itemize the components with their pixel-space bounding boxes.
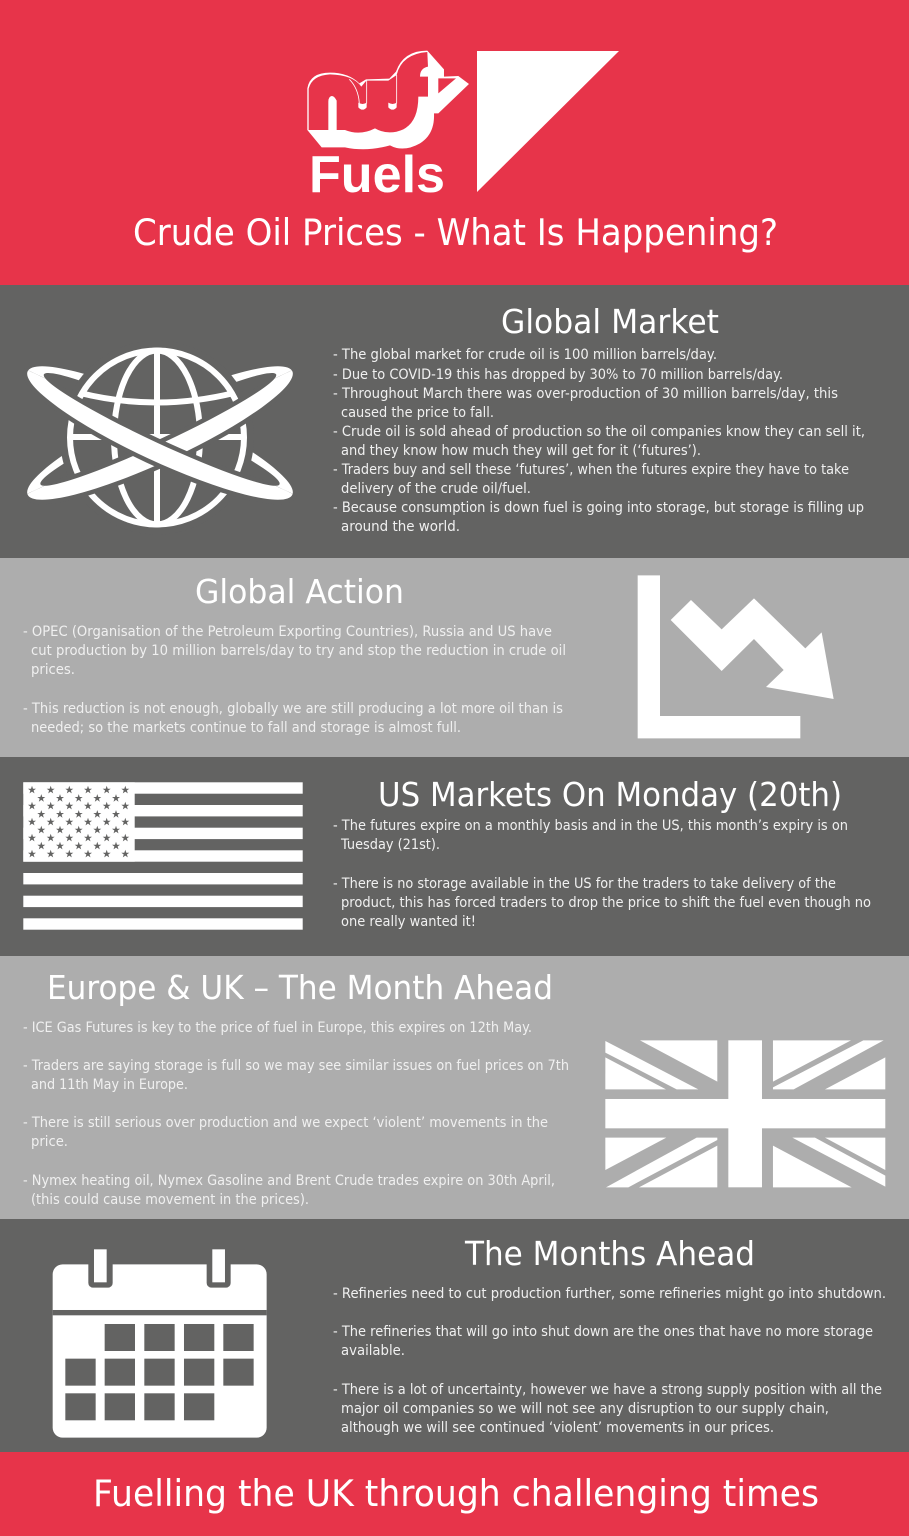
panel: months ahead bbox=[0, 1219, 909, 1452]
text block: us markets: - There is no storage available in the US for the traders to take delivery of the bbox=[333, 876, 836, 892]
panel: global market bbox=[27, 308, 864, 531]
text block: global action: - This reduction is not enough, globally we are still producing a lot more oil than is bbox=[23, 701, 563, 717]
text block: global market: - Because consumption is down fuel is going into storage, but storage is filling up bbox=[333, 500, 864, 516]
text block: us markets: one really wanted it! bbox=[341, 914, 476, 930]
footer tagline: Fuelling the UK through challenging times bbox=[93, 1472, 819, 1515]
heading: global market: Global Market bbox=[501, 302, 719, 341]
text block: europe and uk bbox=[23, 1020, 569, 1208]
panel: global action bbox=[0, 558, 909, 757]
text block: global market: - Crude oil is sold ahead of production so the oil companies know they can sell it, bbox=[333, 424, 865, 440]
icon: nwf letters bbox=[307, 51, 469, 149]
heading: global action: Global Action bbox=[195, 572, 404, 611]
text block: europe and uk: - Traders are saying storage is full so we may see similar issues on fuel prices on 7th bbox=[23, 1058, 569, 1074]
text block: us markets: Tuesday (21st). bbox=[340, 837, 440, 853]
text block: global market: and they know how much they will get for it (‘futures’). bbox=[341, 443, 701, 459]
text block: months ahead: available. bbox=[341, 1343, 405, 1359]
text block: months ahead: major oil companies so we will not see any disruption to our supply chain, bbox=[341, 1401, 829, 1417]
text block: global action: prices. bbox=[31, 662, 75, 678]
text block: europe and uk: and 11th May in Europe. bbox=[31, 1077, 188, 1093]
text block: months ahead bbox=[333, 1286, 886, 1436]
text block: europe and uk: - Nymex heating oil, Nymex Gasoline and Brent Crude trades expire on 30th April, bbox=[23, 1173, 555, 1189]
text block: months ahead: - The refineries that will go into shut down are the ones that have no more storage bbox=[333, 1324, 873, 1340]
text block: global market bbox=[333, 347, 865, 535]
text block: us markets bbox=[333, 818, 871, 930]
panel: footer bbox=[0, 1452, 909, 1536]
text block: global market: - Due to COVID-19 this has dropped by 30% to 70 million barrels/day. bbox=[333, 367, 783, 383]
text block: global action bbox=[23, 624, 566, 736]
text block: months ahead: although we will see continued ‘violent’ movements in our prices. bbox=[341, 1420, 774, 1436]
text block: global market: around the world. bbox=[341, 519, 460, 535]
text block: global action: cut production by 10 million barrels/day to try and stop the reduction in crude oil bbox=[31, 643, 566, 659]
logo wordmark: Fuels bbox=[309, 146, 445, 204]
text block: us markets: product, this has forced traders to drop the price to shift the fuel even though no bbox=[341, 895, 871, 911]
text block: global market: - Traders buy and sell these ‘futures’, when the futures expire they have to take bbox=[333, 462, 849, 478]
panel: europe and uk bbox=[0, 956, 909, 1219]
heading: months ahead: The Months Ahead bbox=[464, 1234, 755, 1273]
text block: months ahead: - Refineries need to cut production further, some refineries might go into shutdown. bbox=[333, 1286, 886, 1302]
icon: US flag bbox=[23, 782, 303, 930]
icon: globe with orbits bbox=[27, 348, 293, 528]
icon: falling chart bbox=[638, 575, 834, 738]
text block: us markets: - The futures expire on a monthly basis and in the US, this month’s expiry is on bbox=[333, 818, 848, 834]
logo: nwf Fuels bbox=[307, 51, 619, 204]
title: Crude Oil Prices - What Is Happening? bbox=[133, 211, 778, 254]
text block: months ahead: - There is a lot of uncertainty, however we have a strong supply position with all the bbox=[333, 1382, 882, 1398]
text block: europe and uk: (this could cause movement in the prices). bbox=[31, 1192, 309, 1208]
text block: global action: needed; so the markets continue to fall and storage is almost full. bbox=[31, 720, 461, 736]
text block: global action: - OPEC (Organisation of the Petroleum Exporting Countries), Russia and US have bbox=[23, 624, 552, 640]
heading: europe and uk: Europe & UK – The Month Ahead bbox=[47, 968, 553, 1007]
text block: global market: caused the price to fall. bbox=[341, 405, 494, 421]
text block: europe and uk: price. bbox=[31, 1134, 68, 1150]
text block: global market: - Throughout March there was over-production of 30 million barrels/day, this bbox=[333, 386, 838, 402]
text block: global market: - The global market for crude oil is 100 million barrels/day. bbox=[333, 347, 717, 363]
heading: us markets: US Markets On Monday (20th) bbox=[378, 775, 842, 814]
icon: UK flag bbox=[605, 1040, 885, 1187]
icon: white triangle bbox=[477, 51, 619, 192]
panel: header bbox=[0, 0, 909, 285]
text block: europe and uk: - There is still serious over production and we expect ‘violent’ movements in the bbox=[23, 1115, 548, 1131]
icon: calendar bbox=[53, 1249, 267, 1438]
text block: europe and uk: - ICE Gas Futures is key to the price of fuel in Europe, this expires on 12th May. bbox=[23, 1020, 532, 1036]
text block: global market: delivery of the crude oil/fuel. bbox=[341, 481, 531, 497]
panel: us markets bbox=[0, 757, 909, 956]
